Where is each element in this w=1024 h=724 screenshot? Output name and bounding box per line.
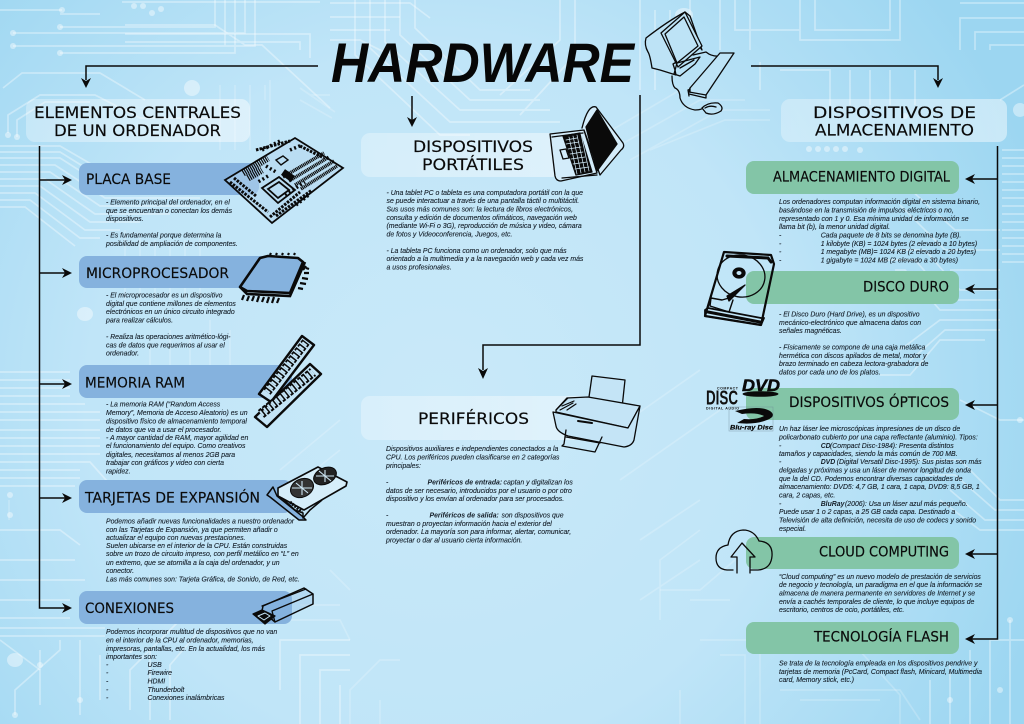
icon: dvd logo: DVD [742, 376, 780, 395]
text: dispositivos portatiles: se puede interactuar a través de una pantalla táctil o multitáctil. [386, 198, 579, 205]
icon: motherboard [225, 138, 343, 223]
section: dispositivos opticos: especial. [779, 526, 806, 533]
section: placa base [79, 163, 259, 248]
section: almacenamiento digital: Los ordenadores computan información digital en sistema binario, [779, 199, 980, 206]
section: dispositivos opticos: (2006): Usa un láser azul más pequeño. [845, 501, 968, 508]
text: dispositivos portatiles: a usos profesionales. [386, 264, 452, 272]
section: dispositivos opticos: (Compact Disc-1984): Presenta distintos [830, 443, 954, 450]
section: tarjetas de expansion: actualizar el equipo con nuevas prestaciones. [106, 535, 246, 542]
section: microprocesador [79, 256, 295, 358]
heading panel: perifericos [361, 396, 587, 440]
section: dispositivos opticos [746, 388, 982, 533]
section: tarjetas de expansion: con las Tarjetas de Expansión, ya que permiten añadir o [106, 527, 278, 534]
section: almacenamiento digital: llama bit (b), la menor unidad digital. [779, 224, 890, 231]
section: memoria ram: de datos que va a usar el procesador. [106, 427, 222, 434]
section: tecnologia flash: tarjetas de memoria (PcCard, Compact flash, Minicard, Multimedia [779, 669, 982, 676]
section: disco duro: - El Disco Duro (Hard Drive), es un dispositivo [779, 312, 920, 318]
text: dispositivos portatiles: - Una tablet PC o tableta es una computadora portátil con la que [386, 190, 583, 197]
section: conexiones: - [106, 695, 109, 702]
icon: printer [553, 376, 640, 452]
section: cloud computing: “Cloud computing” es un nuevo modelo de prestación de servicios [779, 574, 981, 581]
column: dispositivos de almacenamiento [705, 99, 1007, 684]
section: almacenamiento digital: basándose en la transmisión de impulsos eléctricos o no, [779, 208, 954, 214]
section: tecnologia flash [746, 622, 982, 684]
section: dispositivos opticos: CD [821, 443, 831, 450]
section: dispositivos opticos: cara, 2 capas, etc. [779, 492, 835, 500]
section: memoria ram: MEMORIA RAM [85, 376, 185, 392]
section: cloud computing: envía a cachés temporales de cliente, lo que incluye equipos de [779, 599, 975, 606]
section: cloud computing: CLOUD COMPUTING [819, 545, 949, 561]
section: memoria ram [79, 365, 292, 476]
text: dispositivos portatiles [386, 190, 584, 272]
text: dispositivos portatiles: Sus usos más comunes son: la lectura de libros electrónicos, [386, 206, 573, 214]
section: conexiones [79, 591, 292, 702]
arrow: title to perifericos [478, 95, 640, 379]
section: dispositivos opticos: policarbonato cubierto por una capa reflectante (aluminio). Tipos: [778, 434, 978, 442]
section: disco duro: mecánico-electrónico que almacena datos con [779, 320, 921, 327]
text: perifericos: ordenador. La mayoría son para informar, alertar, comunicar, [386, 529, 571, 536]
column: elementos centrales [26, 99, 347, 702]
section: microprocesador: - El microprocesador es un dispositivo [106, 292, 223, 300]
section: dispositivos opticos: - [779, 501, 782, 508]
section: conexiones: - [106, 670, 109, 677]
section: conexiones: - [106, 678, 109, 686]
section: conexiones: Conexiones inalámbricas [148, 695, 225, 702]
icon: blu-ray logo: Blu-ray Disc [730, 426, 774, 432]
icon: laptop [550, 107, 624, 181]
section: conexiones: HDMI [148, 678, 165, 686]
section: dispositivos opticos: (Digital Versatil Disc-1995): Sus pistas son más [837, 459, 982, 466]
section: cloud computing: almacena de manera permanente en servidores de Internet y se [779, 590, 975, 598]
text: perifericos: captan y digitalizan los [504, 480, 573, 486]
icon: cloud upload [716, 530, 772, 573]
section: conexiones: - [106, 687, 109, 694]
text: perifericos: - [386, 512, 389, 520]
text: dispositivos portatiles: consulta y edición de documentos ofimáticos, navegación web [386, 215, 577, 222]
section: disco duro: brazo terminado en cabeza lectora-grabadora de [779, 361, 929, 368]
section: disco duro: DISCO DURO [863, 280, 949, 296]
section: almacenamiento digital: 1 gigabyte = 1024 MB (2 elevado a 30 bytes) [821, 258, 958, 264]
connector tree left [40, 146, 72, 613]
icon: usb stick [253, 588, 313, 624]
text: perifericos: dispositivo y los envían al ordenador para ser procesados. [386, 496, 564, 503]
heading panel: dispositivos de almacenamiento: ALMACENAMIENTO [815, 121, 974, 140]
section: disco duro: hermética con discos apilados de metal, motor y [779, 353, 927, 360]
arrow: title to dispositivos de almacenamiento [751, 66, 943, 88]
section: conexiones: CONEXIONES [85, 601, 174, 617]
section: almacenamiento digital: ALMACENAMIENTO DIGITAL [773, 170, 950, 186]
section: dispositivos opticos: DVD [821, 459, 835, 466]
section: microprocesador: para realizar cálculos. [105, 317, 173, 324]
text: perifericos: proyectar o dar al usuario cierta información. [385, 538, 522, 544]
section: tecnologia flash: Se trata de la tecnología empleada en los dispositivos pendrive y [779, 660, 978, 668]
section: memoria ram: rapidez. [106, 468, 131, 476]
section: conexiones: importantes son: [106, 654, 157, 661]
heading panel: elementos centrales: DE UN ORDENADOR [54, 121, 221, 140]
section: tarjetas de expansion: conector. [106, 568, 134, 575]
icon: hard disk [705, 251, 774, 325]
section: disco duro: - Físicamente se compone de una caja metálica [779, 344, 925, 352]
section: almacenamiento digital [746, 161, 980, 264]
section: memoria ram: trabajar con gráficos y video con cierta [106, 460, 224, 467]
heading panel: dispositivos portatiles: PORTÁTILES [422, 155, 524, 174]
section: conexiones: Thunderbolt [148, 687, 185, 694]
text: perifericos: datos de ser necesario, introducidos por el usuario o por otro [386, 488, 572, 495]
section: disco duro: señales magnéticas. [779, 328, 842, 335]
section: dispositivos opticos: tamaños y capacidades, siendo la más común de 700 MB. [779, 451, 958, 458]
section: dispositivos opticos: - [779, 459, 782, 466]
icon: compact disc logo: DISC [706, 388, 738, 410]
text: dispositivos portatiles: (mediante Wi-Fi o 3G), reproducción de música y video, cámara [386, 223, 582, 230]
section: disco duro [746, 271, 959, 376]
icon: blu-ray logo [729, 407, 774, 432]
section: microprocesador: - Realiza las operaciones aritmético-lógi- [106, 334, 231, 341]
section: dispositivos opticos: - [779, 443, 782, 450]
section: almacenamiento digital: - [779, 241, 782, 248]
heading panel: dispositivos portatiles: DISPOSITIVOS [413, 137, 533, 156]
arrow: title to dispositivos portatiles [407, 96, 417, 127]
section: conexiones: Firewire [148, 670, 172, 677]
section: tecnologia flash: card, Memory stick, etc.) [779, 677, 854, 684]
section: microprocesador: cas de datos que requerimos al usar el [106, 342, 225, 349]
section: microprocesador: electrónicos en un único circuito integrado [106, 309, 235, 316]
section: tarjetas de expansion: Podemos añadir nuevas funcionalidades a nuestro ordenador [106, 518, 295, 526]
section: dispositivos opticos: almacenamiento: DVD5: 4,7 GB, 1 cara, 1 capa, DVD9: 8,5 GB, 1 [779, 484, 980, 491]
section: dispositivos opticos: que la del CD. Podemos encontrar diversas capacidades de [779, 476, 963, 483]
section: microprocesador: ordenador. [106, 350, 139, 358]
text: perifericos [385, 446, 573, 544]
section: dispositivos opticos: delgadas y próximas y usa un láser de menor longitud de onda [779, 468, 971, 474]
column: perifericos [361, 376, 640, 544]
section: memoria ram: el funcionamiento del equipo. Como creativos [106, 443, 246, 450]
text: perifericos: Periféricos de entrada: [428, 480, 502, 486]
section: dispositivos opticos: DISPOSITIVOS ÓPTICOS [789, 393, 949, 411]
heading panel: dispositivos portatiles [361, 133, 561, 177]
text: perifericos: principales: [385, 463, 421, 470]
heading panel: dispositivos de almacenamiento [781, 99, 1007, 142]
text: perifericos: Dispositivos auxiliares e independientes conectados a la [386, 446, 559, 453]
connector tree right [965, 146, 998, 644]
section: placa base: posibilidad de ampliación de componentes. [105, 241, 238, 248]
section: dispositivos opticos: BluRay [821, 501, 846, 508]
section: tarjetas de expansion [79, 480, 300, 584]
section: almacenamiento digital: 1 megabyte (MB)= 1024 KB (2 elevado a 20 bytes) [821, 249, 976, 256]
icon: compact disc logo: DIGITAL AUDIO [706, 406, 739, 410]
section: tarjetas de expansion: TARJETAS DE EXPANSIÓN [84, 489, 260, 507]
text: perifericos: son dispositivos que [502, 512, 564, 520]
heading panel: perifericos: PERIFÉRICOS [418, 409, 529, 428]
section: almacenamiento digital: - [779, 232, 782, 240]
section: dispositivos opticos: Televisión de alta definición, necesita de uso de codecs y sonido [779, 518, 976, 524]
section: conexiones: USB [148, 662, 162, 669]
text: perifericos: CPU. Los periféricos pueden clasificarse en 2 categorías [386, 454, 560, 461]
section: conexiones: - [106, 662, 109, 669]
heading panel: dispositivos de almacenamiento: DISPOSITIVOS DE [813, 103, 976, 122]
section: placa base: - Elemento principal del ordenador, en el [106, 200, 230, 206]
text: dispositivos portatiles: orientado a la multimedia y a la navegación web y cada vez más [386, 256, 584, 263]
text: perifericos: Periféricos de salida: [430, 512, 499, 520]
section: cloud computing: escritorio, centros de ocio, portátiles, etc. [779, 607, 904, 614]
section: memoria ram: digitales, necesitamos al menos 2GB para [106, 452, 235, 459]
section: almacenamiento digital: representado con 1 y 0. Esa mínima unidad de información se [779, 216, 969, 223]
text: perifericos: - [386, 480, 389, 486]
icon: desktop computer [645, 12, 734, 114]
heading panel: elementos centrales: ELEMENTOS CENTRALES [34, 103, 241, 122]
section: conexiones: Podemos incorporar multitud de dispositivos que no van [106, 629, 277, 636]
section: almacenamiento digital: - [779, 249, 782, 256]
text: dispositivos portatiles: - La tableta PC funciona como un ordenador, solo que más [386, 248, 567, 255]
section: tarjetas de expansion: un extremo, que se atornilla a la caja del ordenador, y un [106, 560, 280, 567]
section: microprocesador: MICROPROCESADOR [86, 266, 229, 282]
section: tarjetas de expansion: sobre un trozo de circuito impreso, con perfil metálico en “L” en [106, 551, 299, 558]
column: dispositivos portatiles [361, 107, 624, 272]
section: tarjetas de expansion: Suelen ubicarse en el interior de la CPU. Están construidas [106, 543, 288, 550]
icon: microprocessor chip [240, 253, 309, 303]
section: conexiones: en el interior de la CPU al ordenador, memorias, [106, 638, 254, 644]
section: placa base: dispositivos. [106, 216, 144, 223]
section: disco duro: datos por cada uno de los platos. [779, 370, 881, 376]
section: memoria ram: - A mayor cantidad de RAM, mayor agilidad en [106, 435, 249, 442]
text: dispositivos portatiles: de fotos y Videoconferencia, Juegos, etc. [386, 232, 512, 238]
section: tarjetas de expansion: Las más comunes son: Tarjeta Gráfica, de Sonido, de Red, etc. [106, 576, 300, 584]
icon: ram modules [255, 336, 321, 427]
title: HARDWARE [331, 31, 636, 94]
section: placa base: que se encuentran o conectan los demás [106, 208, 233, 215]
section: microprocesador: digital que contiene millones de elementos [106, 301, 236, 308]
section: placa base: PLACA BASE [86, 172, 171, 188]
arrow: title to elementos centrales [81, 66, 318, 88]
section: cloud computing [746, 537, 982, 614]
icon: compact disc logo [706, 386, 739, 410]
section: cloud computing: de negocio y tecnología, un paradigma en el que la información se [779, 582, 982, 589]
text: perifericos: muestran o proyectan información hacia el exterior del [386, 521, 552, 528]
section: conexiones: impresoras, pantallas, etc. En la actualidad, los más [106, 646, 266, 653]
icon: graphics card [267, 464, 347, 520]
section: tecnologia flash: TECNOLOGÍA FLASH [813, 629, 949, 646]
section: dispositivos opticos: Un haz láser lee microscópicas impresiones de un disco de [779, 426, 960, 433]
heading panel: elementos centrales [26, 99, 250, 142]
section: placa base: - Es fundamental porque determina la [106, 233, 221, 240]
section: memoria ram: Memory”, Memoria de Acceso Aleatorio) es un [106, 410, 248, 417]
icon: compact disc logo: COMPACT [717, 386, 739, 390]
section: memoria ram: dispositivo físico de almacenamiento temporal [106, 418, 247, 425]
section: almacenamiento digital: - [779, 258, 782, 264]
section: memoria ram: - La memoria RAM (“Random Access [106, 402, 221, 408]
section: almacenamiento digital: 1 kilobyte (KB) = 1024 bytes (2 elevado a 10 bytes) [821, 241, 977, 248]
section: almacenamiento digital: Cada paquete de 8 bits se denomina byte (B). [821, 232, 961, 240]
section: dispositivos opticos: Puede usar 1 o 2 capas, a 25 GB cada capa. Destinado a [779, 509, 955, 516]
